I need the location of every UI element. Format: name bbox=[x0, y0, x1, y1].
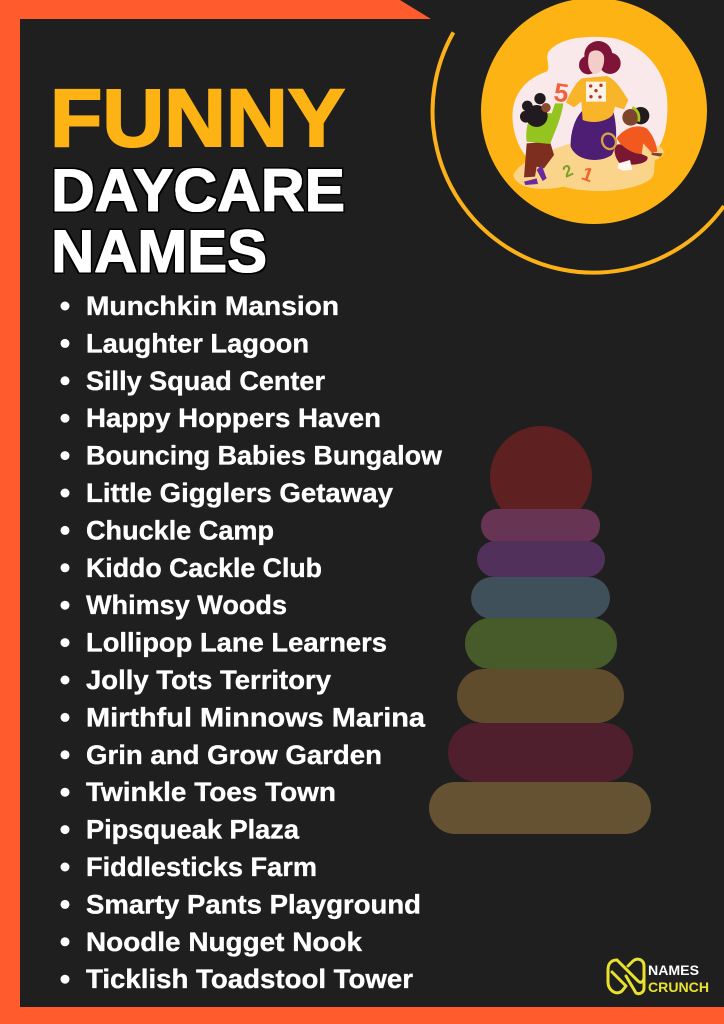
names: Chuckle Camp bbox=[86, 515, 274, 545]
names: Bouncing Babies Bungalow bbox=[86, 441, 443, 471]
name list bbox=[60, 291, 443, 994]
illustration: teacher and children bbox=[512, 37, 667, 191]
names: Kiddo Cackle Club bbox=[86, 553, 322, 583]
logo word: NAMES: NAMES bbox=[648, 962, 699, 978]
names: Jolly Tots Territory bbox=[86, 665, 331, 695]
ring 6 bbox=[448, 723, 633, 782]
ring 5 bbox=[457, 669, 624, 723]
ring 3 bbox=[471, 577, 610, 619]
right child bbox=[600, 107, 663, 171]
ring 1 bbox=[481, 509, 600, 542]
names: Ticklish Toadstool Tower bbox=[86, 964, 414, 994]
names: Silly Squad Center bbox=[86, 366, 325, 396]
ball bbox=[490, 426, 592, 528]
number 2: 2 bbox=[560, 160, 576, 182]
bullets bbox=[60, 302, 70, 984]
names: Laughter Lagoon bbox=[86, 328, 309, 358]
logo mark bbox=[608, 959, 644, 994]
names: Munchkin Mansion bbox=[86, 291, 339, 321]
left child bbox=[520, 93, 563, 185]
logo: Names Crunch bbox=[608, 959, 709, 995]
ring 4 bbox=[465, 618, 617, 669]
title word: NAMES: NAMES bbox=[51, 218, 267, 285]
floor bbox=[513, 143, 664, 191]
title bbox=[50, 73, 345, 285]
names: Smarty Pants Playground bbox=[86, 889, 421, 919]
stacking ring toy bbox=[429, 426, 651, 834]
names: Lollipop Lane Learners bbox=[86, 628, 387, 658]
names: Little Gigglers Getaway bbox=[86, 478, 393, 508]
yellow arc bbox=[433, 32, 724, 273]
white blob bbox=[512, 37, 667, 157]
ring 2 bbox=[477, 541, 605, 577]
number 1: 1 bbox=[579, 164, 596, 187]
names: Pipsqueak Plaza bbox=[86, 815, 300, 845]
names: Twinkle Toes Town bbox=[86, 777, 336, 807]
number 5: 5 bbox=[552, 77, 571, 108]
ring 7 bbox=[429, 782, 651, 834]
title word: FUNNY: FUNNY bbox=[50, 73, 345, 164]
names: Mirthful Minnows Marina bbox=[86, 702, 426, 732]
yellow circle with illustration bbox=[481, 0, 707, 224]
names: Fiddlesticks Farm bbox=[86, 852, 317, 882]
title word: DAYCARE: DAYCARE bbox=[51, 157, 345, 224]
names: Grin and Grow Garden bbox=[86, 740, 382, 770]
names: Whimsy Woods bbox=[86, 590, 287, 620]
circle bbox=[481, 0, 707, 224]
names bbox=[86, 291, 443, 994]
names: Happy Hoppers Haven bbox=[86, 403, 381, 433]
logo word: CRUNCH: CRUNCH bbox=[648, 979, 709, 995]
names: Noodle Nugget Nook bbox=[86, 927, 363, 957]
teacher bbox=[566, 41, 628, 160]
